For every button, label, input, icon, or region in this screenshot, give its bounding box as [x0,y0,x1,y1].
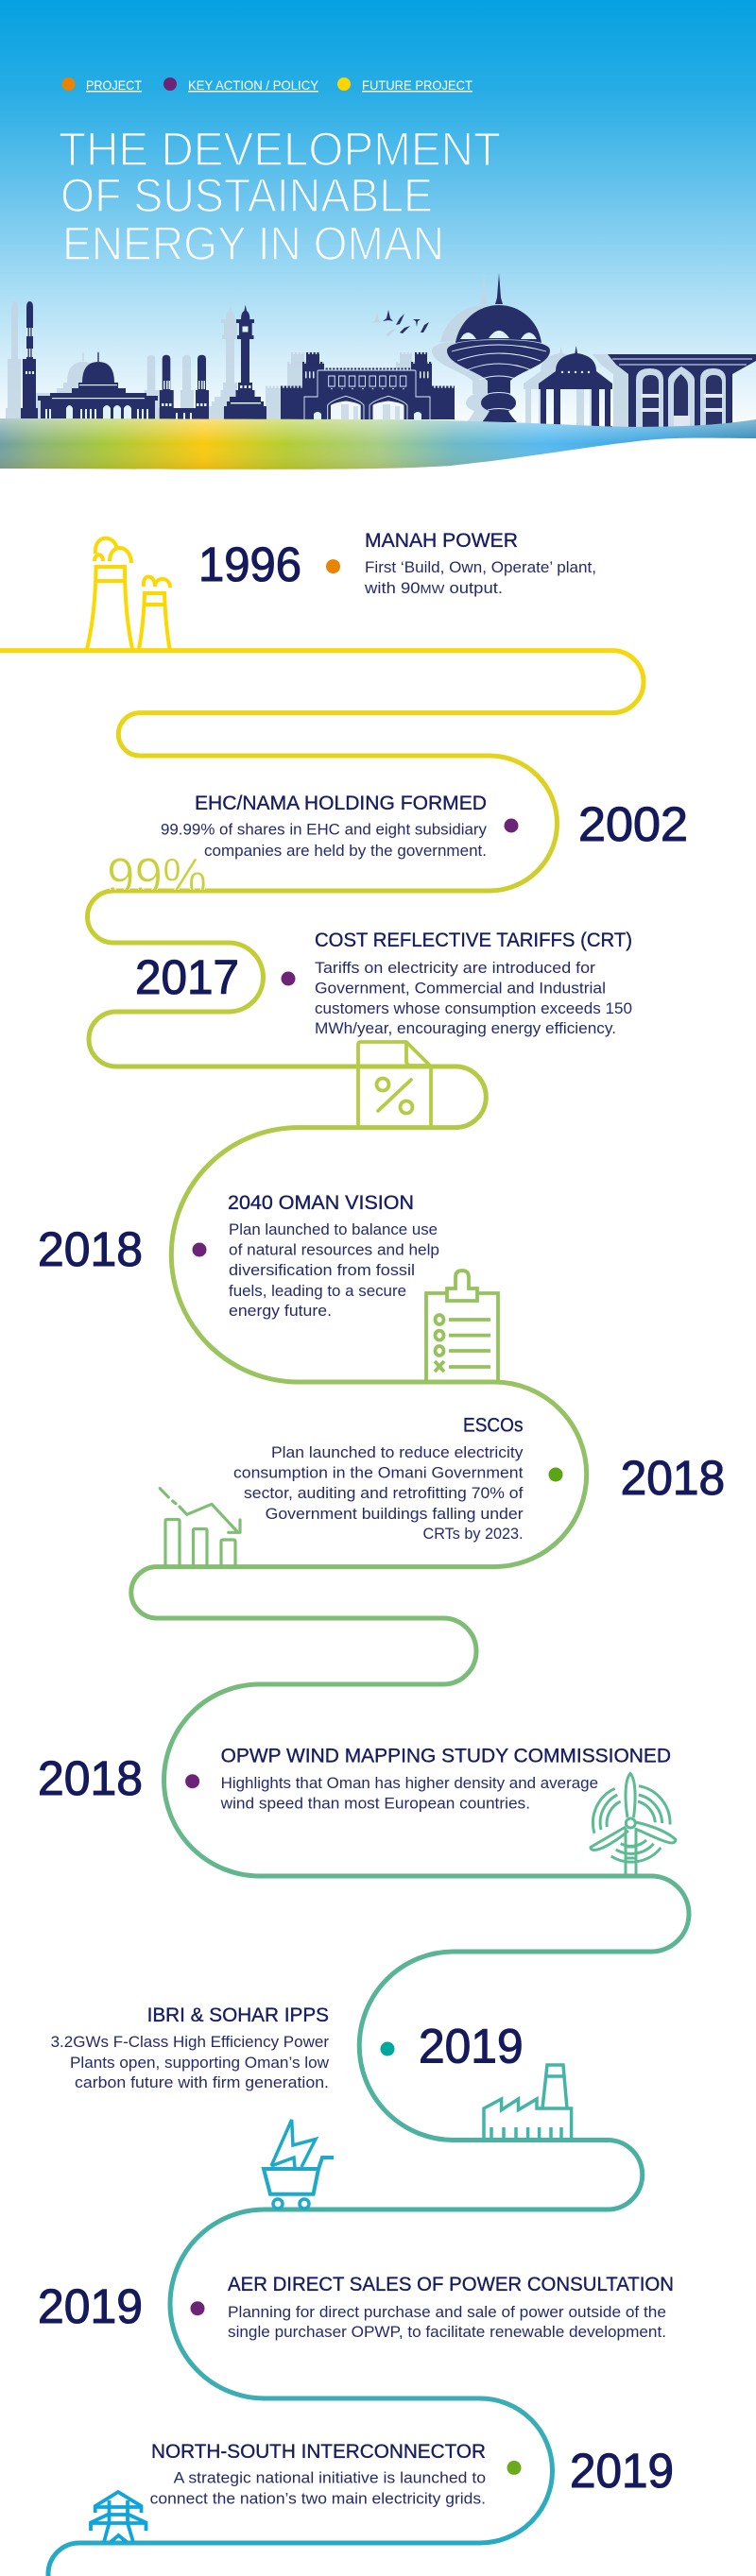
body: Plan launched to balance use [229,1221,438,1238]
year: 2018 [621,1451,725,1505]
body: connect the nation’s two main electricity grids. [150,2490,486,2507]
icon: electricity pylon [91,2492,146,2542]
year: 1996 [198,537,301,591]
skyline details [26,327,590,419]
serpentine timeline road [0,651,689,2576]
fort gate ghost columns [341,404,400,419]
ghost birds [371,312,396,336]
year: 2002 [578,797,688,851]
icon: factory [484,2065,572,2140]
heading: AER DIRECT SALES OF POWER CONSULTATION [228,2274,674,2295]
legend label: project: PROJECT [86,77,142,93]
body [229,1221,439,1320]
body: A strategic national initiative is launched to [174,2470,486,2487]
icon: percent document [358,1042,431,1127]
marker [507,2461,522,2475]
body: Tariffs on electricity are introduced for [315,960,596,977]
body: carbon future with firm generation. [75,2074,329,2091]
icon: 99% figure: 99% [107,846,207,906]
legend [62,77,472,93]
title [59,123,501,270]
skyline detail lines [304,345,752,419]
icon: clipboard checklist [426,1271,498,1381]
body: sector, auditing and retrofitting 70% of [244,1485,524,1502]
event: Manah Power 1996 [198,530,596,597]
year: 2019 [419,2020,524,2073]
fort crenellations [281,353,455,387]
body: 99.99% of shares in EHC and eight subsidiary [161,822,488,839]
heading: ESCOs [463,1415,524,1437]
event: Cost Reflective Tariffs 2017 [135,930,632,1037]
body: diversification from fossil [229,1262,415,1279]
legend label: key action: KEY ACTION / POLICY [188,77,319,93]
body [315,960,632,1037]
marker [505,818,518,833]
body: Government buildings falling under [266,1506,524,1523]
body [228,2304,666,2341]
legend dot: key action [163,77,177,91]
body [150,2470,486,2507]
birds [383,310,429,333]
marker [326,559,340,573]
title: OF SUSTAINABLE [60,169,433,222]
legend dot: future project [337,77,351,91]
body: MWh/year, encouraging energy efficiency. [315,1020,616,1037]
body: Plan launched to reduce electricity [271,1444,524,1461]
skyline main layer [21,273,756,428]
skyline ghost layer [6,273,741,428]
title: THE DEVELOPMENT [59,123,501,176]
icon: power station cooling towers [87,538,170,649]
heading: 2040 OMAN VISION [228,1192,414,1214]
marker [282,971,295,986]
body [364,559,596,597]
event: North-South Interconnector 2019 [150,2441,674,2507]
heading: EHC/NAMA HOLDING FORMED [195,793,487,814]
event: AER direct sales consultation 2019 [38,2274,674,2341]
body: customers whose consumption exceeds 150 [315,1000,632,1017]
year: 2017 [135,950,239,1004]
year: 2019 [570,2444,674,2498]
icon: declining bar chart [160,1489,240,1565]
body: energy future. [229,1303,332,1320]
body: consumption in the Omani Government [233,1465,524,1482]
legend dot: project [62,77,76,91]
legend label: future project: FUTURE PROJECT [362,77,472,93]
title: ENERGY IN OMAN [62,217,444,270]
body: fuels, leading to a secure [229,1283,406,1300]
body [233,1444,524,1543]
Muscat skyline illustration [6,273,756,428]
heading: COST REFLECTIVE TARIFFS (CRT) [315,930,632,951]
body: CRTs by 2023. [423,1526,524,1543]
icon: shopping cart with lightning bolt [264,2120,334,2209]
body: companies are held by the government. [204,843,487,860]
body: single purchaser OPWP, to facilitate renewable development. [228,2324,666,2341]
marker [185,1774,199,1788]
event: OPWP wind mapping 2018 [38,1746,671,1813]
body: Government, Commercial and Industrial [315,981,606,998]
event: Ibri and Sohar IPPs 2019 [51,2005,524,2091]
body [51,2034,330,2091]
heading: MANAH POWER [365,530,518,552]
event: EHC/Nama Holding 2002 [161,793,688,860]
marker [193,1243,206,1256]
body: Highlights that Oman has higher density and average [221,1775,598,1792]
body [161,822,488,860]
body: First ‘Build, Own, Operate’ plant, [365,559,596,576]
event: ESCOs 2018 [233,1415,725,1543]
body: with 90 MW output. [364,580,503,597]
icon: wind turbine [591,1774,676,1874]
year: 2018 [38,1751,143,1805]
ground wave [0,418,756,469]
year: 2018 [38,1222,143,1276]
marker [191,2301,204,2315]
body: wind speed than most European countries. [220,1796,530,1813]
marker [380,2042,395,2056]
skyline ghost crenellations [266,353,439,387]
heading: NORTH-SOUTH INTERCONNECTOR [151,2441,486,2463]
body [220,1775,598,1813]
event: 2040 Oman Vision 2018 [38,1192,439,1320]
body: of natural resources and help [229,1242,439,1259]
marker [548,1468,563,1481]
body: 3.2GWs F-Class High Efficiency Power [51,2034,330,2051]
header sky background [0,0,756,435]
heading: OPWP WIND MAPPING STUDY COMMISSIONED [221,1746,671,1767]
palace arches [636,367,726,427]
body: Plants open, supporting Oman’s low [70,2055,329,2072]
body: Planning for direct purchase and sale of power outside of the [228,2304,666,2321]
heading: IBRI & SOHAR IPPS [147,2005,329,2026]
year: 2019 [38,2279,143,2333]
